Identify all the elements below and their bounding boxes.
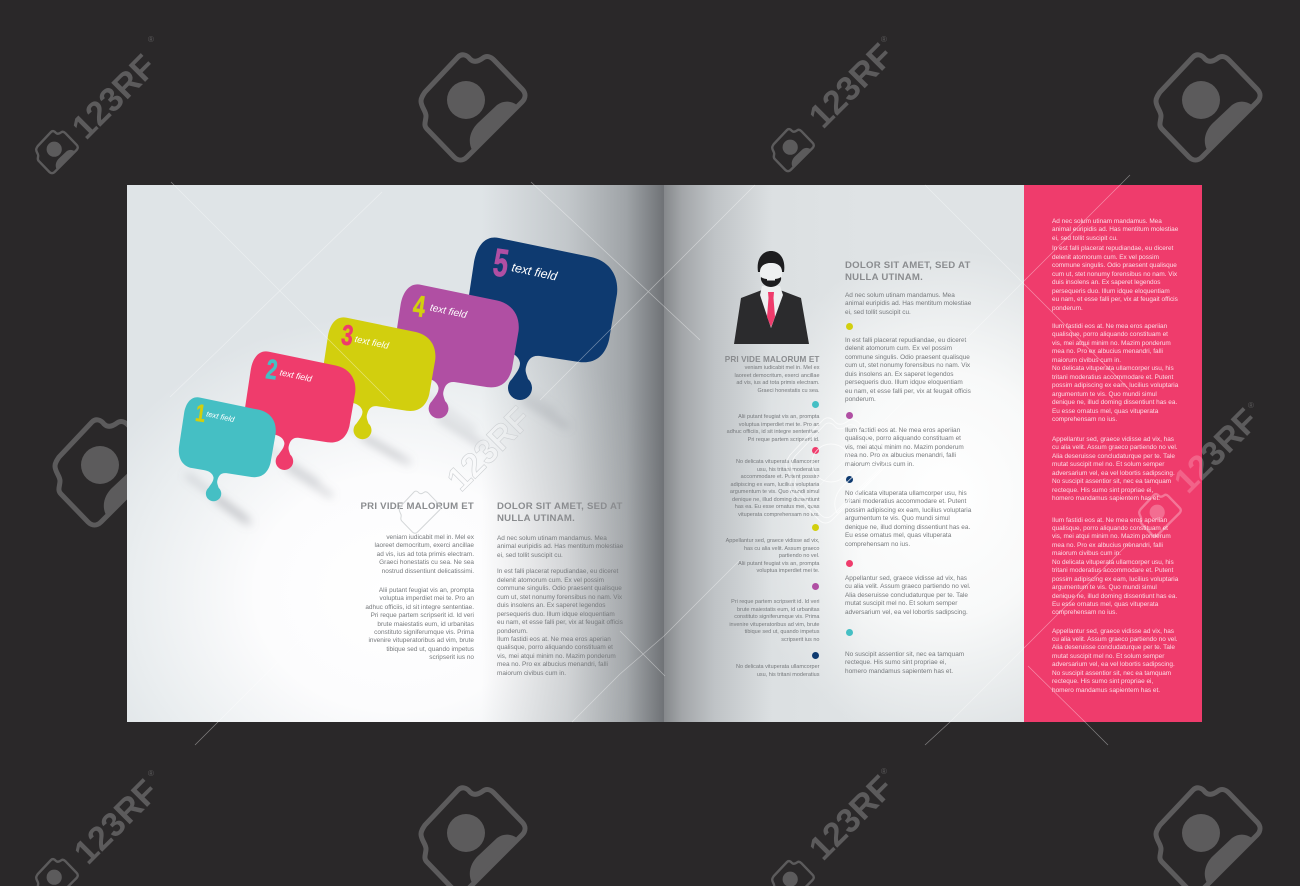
text: small paragraph four [726, 538, 820, 574]
text block: left column, right aligned: Pri reque partem scripserit id. Id veri [371, 612, 474, 619]
text block: left column, right aligned: invenire vituperatoribus ad vim, brute [368, 637, 474, 644]
text: intro paragraph [845, 292, 971, 316]
right page [664, 185, 1024, 722]
label text field: text field [354, 334, 391, 351]
pink panel text four: comprehensam no ius. [1052, 609, 1117, 616]
text: small paragraph four: has cu alia velit. Assum graeco [744, 546, 820, 552]
pink panel text four: mea no. Pro ex albucius menandri, falli [1052, 542, 1163, 549]
text: small paragraph three: argumentum te vis. Quo mundi simul [730, 489, 820, 495]
text: small paragraph two [726, 414, 820, 442]
number 5: 5 [490, 241, 511, 286]
watermark logo top right: ® [881, 35, 887, 44]
text: small paragraph five: constituto signiferumque vis. Prima [734, 614, 820, 620]
text: small paragraph four: voluptua imperdiet mei te. [757, 568, 820, 574]
watermark overlays on the spread [170, 174, 1202, 746]
text block: second column: persequeris duo. Illum idque eloquentiam [497, 611, 615, 618]
heading: dolor sit amet: DOLOR SIT AMET, SED AT [497, 501, 623, 512]
text: small paragraph three: usu, his tritani moderatius [757, 466, 820, 472]
pink panel text one: duis insolens an. Ex saperet legendos [1052, 279, 1160, 286]
pink panel text one [1052, 218, 1178, 312]
text block: left column, right aligned: tibique sed ut, quando impetus [386, 646, 474, 653]
text block: left column, right aligned: ad vis, ius ad tota primis electram. [377, 551, 474, 558]
pink panel text two: vis, mei atqui minim no. Mazim ponderum [1052, 340, 1171, 347]
text: small paragraph two: Alii putant feugiat vis an, prompta [738, 414, 820, 420]
text: small paragraph two: adhuc officiis, id sit integre sententiae. [727, 429, 820, 435]
text: paragraph four: denique ne, illud doming dissentiunt has ea. [845, 524, 970, 531]
pink panel text five: Alia deseruisse concludaturque per te. Tale [1052, 644, 1175, 651]
text: paragraph five: cu alia velit. Assum graeco partiendo no vel. [845, 583, 971, 590]
watermark logo middle right: ® [1248, 401, 1254, 410]
bubble 5 [466, 237, 617, 400]
number 3: 3 [339, 320, 355, 352]
pink panel text four: No delicata vituperata ullamcorper usu, his [1052, 559, 1174, 566]
text block: second column: Ilum fastidi eos at. Ne mea eros aperian [497, 636, 611, 643]
text block: second column: duis insolens an. Ex saperet legendos [497, 602, 605, 609]
text: paragraph two: persequeris duo. Illum idque eloquentiam [845, 379, 963, 386]
label text field: text field [279, 367, 314, 384]
pink panel text one: delenit atomorum cum. Ex vel possim [1052, 254, 1159, 261]
pink panel text one: In est falli placerat repudiandae, eu diceret [1052, 245, 1173, 252]
text block: left column, right aligned: veniam iudicabit mel in. Mel ex [386, 534, 474, 541]
text: small paragraph three: accommodare et. Putent possim [741, 474, 820, 480]
text: small paragraph three: denique ne, illud doming dissentiunt [732, 496, 820, 502]
text: paragraph four: Eu esse ornatus mel, quas vituperata [845, 532, 951, 539]
watermark logo on pink panel: 123RF [1167, 402, 1266, 501]
pink panel text two: No delicata vituperata ullamcorper usu, his [1052, 365, 1174, 372]
bubble 3 [322, 317, 435, 439]
pink panel text two: maiorum civibus cum in. [1052, 357, 1121, 364]
text block: left column, right aligned: scripserit ius no [429, 654, 474, 661]
text block: second column: mea no. Pro ex albucius menandri, falli [497, 661, 608, 668]
label text field: text field [429, 303, 468, 321]
text: paragraph six: No suscipit assentior sit, nec ea tamquam [845, 651, 964, 658]
pink panel text four: argumentum te vis. Quo mundi simul [1052, 584, 1157, 591]
text: paragraph two: eu nam, et esse falli per, vix at feugait officis [845, 388, 971, 395]
text block: second column: Ad nec solum utinam mandamus. Mea [497, 535, 607, 542]
pink panel text three: Alia deseruisse concludaturque per te. Tale [1052, 453, 1175, 460]
pink panel text four: maiorum civibus cum in. [1052, 550, 1121, 557]
pink panel text three: homero mandamus sapientem has et. [1052, 495, 1160, 502]
pink panel text one: eu nam, et esse falli per, vix at feugait officis [1052, 296, 1178, 303]
pink panel text three [1052, 436, 1178, 502]
pink panel text four [1052, 516, 1178, 616]
dot: navy small column [812, 652, 819, 659]
text block: left column, right aligned: laoreet democritum, exerci ancillae [375, 542, 474, 549]
text: paragraph four: tritani moderatius accommodare et. Putent [845, 498, 966, 505]
pink panel text four: vis, mei atqui minim no. Mazim ponderum [1052, 533, 1171, 540]
pink panel text five [1052, 628, 1178, 694]
dot: pink small column [812, 447, 819, 454]
watermark logo bottom left: 123RF [67, 773, 166, 872]
number 4: 4 [411, 290, 428, 324]
heading: small pri vide malorum et: PRI VIDE MALORUM ET [725, 355, 820, 364]
pink panel text two: Eu esse ornatus mel, quas vituperata [1052, 408, 1158, 415]
dot: teal small column [812, 401, 819, 408]
watermark icon top far right [1156, 55, 1260, 160]
text: paragraph two: In est falli placerat repudiandae, eu diceret [845, 337, 966, 344]
heading: dolor sit amet: NULLA UTINAM. [497, 513, 575, 524]
pink panel text two [1052, 323, 1178, 423]
label text field: text field [205, 409, 236, 424]
text: paragraph four: comprehensam no ius. [845, 541, 910, 548]
watermark logo top left [36, 35, 164, 173]
pink panel text five: cu alia velit. Assum graeco partiendo no vel. [1052, 636, 1178, 643]
heading: right page dolor sit amet: NULLA UTINAM. [845, 272, 923, 283]
text: paragraph three [845, 427, 964, 468]
pink panel text two: mea no. Pro ex albucius menandri, falli [1052, 348, 1163, 355]
pink panel text two: comprehensam no ius. [1052, 416, 1117, 423]
text: small intro: ad vis, ius ad tota primis electram. [736, 380, 820, 386]
text block: left column, right aligned: brute maiestatis eum, id urbanitas [377, 621, 474, 628]
pink panel text four: Ilum fastidi eos at. Ne mea eros aperiian [1052, 516, 1167, 524]
watermark logo bottom left [36, 769, 166, 886]
text: intro paragraph: Ad nec solum utinam mandamus. Mea [845, 292, 955, 299]
watermark logo top right: 123RF [802, 37, 901, 136]
left page [127, 185, 664, 722]
text: paragraph six: recteque. His sumo sint propriae ei, [845, 659, 946, 666]
heading: right page dolor sit amet: DOLOR SIT AMET, SED AT [845, 260, 971, 271]
watermark logo outline on left page: 123RF [440, 400, 539, 499]
text: paragraph two: ponderum. [845, 396, 876, 403]
pink panel text one: ponderum. [1052, 305, 1083, 312]
text: paragraph two [845, 337, 971, 403]
text: small intro [734, 365, 820, 394]
text: paragraph five [845, 575, 971, 616]
pink panel text four: denique ne, illud doming dissentiunt has ea. [1052, 593, 1177, 600]
text: paragraph five: Alia deseruisse concludaturque per te. Tale [845, 592, 968, 599]
text: small paragraph six [736, 664, 820, 678]
text: small paragraph six: No delicata vituperata ullamcorper [736, 664, 820, 670]
text: paragraph three: maiorum civibus cum in. [845, 461, 914, 468]
pink panel text three: No suscipit assentior sit, nec ea tamquam [1052, 478, 1171, 485]
pink panel text five: No suscipit assentior sit, nec ea tamquam [1052, 670, 1171, 677]
label text field: text field [510, 260, 560, 284]
text block: second column: eu nam, et esse falli per, vix at feugait officis [497, 619, 623, 626]
pink panel text three: cu alia velit. Assum graeco partiendo no vel. [1052, 444, 1178, 451]
text: paragraph four: No delicata vituperata ullamcorper usu, his [845, 490, 967, 497]
text: paragraph four [845, 490, 972, 548]
text: paragraph two: commune singulis. Odio praesent qualisque [845, 354, 970, 361]
text block: left column, right aligned: voluptua imperdiet mei te. Pro an [380, 595, 474, 602]
text: paragraph six: homero mandamus sapientem has et. [845, 668, 953, 675]
text: small paragraph two: Pri reque partem scripserit id. [748, 436, 820, 442]
text: small paragraph four: Alii putant feugiat vis an, prompta [738, 560, 820, 566]
text block: left column, right aligned: constituto signiferumque vis. Prima [374, 629, 474, 636]
text: small paragraph four: partiendo no vel. [779, 553, 820, 559]
text: paragraph six [845, 651, 964, 675]
watermark logo outline on left page [399, 400, 539, 533]
watermark logo bottom right [772, 767, 901, 886]
text: small paragraph two: voluptua imperdiet mei te. Pro an [739, 422, 820, 428]
text: small paragraph three: vituperata comprehensam no ius. [738, 512, 820, 518]
heading: right page dolor sit amet [845, 260, 971, 283]
dot: purple [846, 412, 853, 419]
dot: teal [846, 629, 853, 636]
watermark logo top left: 123RF [65, 48, 164, 147]
text: small paragraph five: invenire vituperatoribus ad vim, brute [729, 622, 820, 628]
text: small paragraph five: scripserit ius no [781, 636, 820, 642]
text block: second column: vis, mei atqui minim no. Mazim ponderum [497, 653, 616, 660]
bubble 1 [179, 397, 276, 501]
text block: left column, right aligned: adhuc officiis, id sit integre sententiae. [365, 604, 474, 611]
heading: pri vide malorum et: PRI VIDE MALORUM ET [361, 501, 474, 512]
pink panel text two: possim adipiscing ex eam, lucilius voluptaria [1052, 382, 1178, 389]
pink panel text five: recteque. His sumo sint propriae ei, [1052, 678, 1153, 685]
pink panel text five: Appellantur sed, graece vidisse ad vix, has [1052, 628, 1174, 634]
text: small paragraph three: has ea. Eu esse ornatus mel, quas [735, 504, 820, 510]
text block: second column: In est falli placerat repudiandae, eu diceret [497, 568, 618, 575]
pink panel text two: Ilum fastidi eos at. Ne mea eros aperiian [1052, 323, 1167, 330]
pink panel text two: argumentum te vis. Quo mundi simul [1052, 391, 1157, 398]
pink panel text three: recteque. His sumo sint propriae ei, [1052, 487, 1153, 494]
text: small paragraph four: Appellantur sed, graece vidisse ad vix, [726, 538, 820, 544]
text: small intro: laoreet democritum, exerci ancillae [735, 372, 820, 378]
text: intro paragraph: ei, sed tollit suscipit cu. [845, 309, 911, 316]
pink panel text three: Appellantur sed, graece vidisse ad vix, has [1052, 436, 1174, 443]
text: paragraph three: qualisque, porro aliquando constituam et [845, 435, 961, 442]
pink side panel [1024, 185, 1202, 722]
text block: second column: delenit atomorum cum. Ex vel possim [497, 577, 604, 584]
watermark logo bottom right: ® [881, 767, 887, 776]
text: paragraph two: delenit atomorum cum. Ex vel possim [845, 345, 952, 352]
bubble 2 [245, 351, 355, 470]
text: paragraph four: possim adipiscing ex eam, lucilius voluptaria [845, 507, 971, 514]
watermark icon bottom far right [1156, 788, 1260, 886]
text: small intro: Graeci honestatis cu sea. [757, 388, 820, 394]
watermark icon top centre [421, 55, 525, 160]
text block: second column: ei, sed tollit suscipit cu. [497, 552, 563, 559]
number 1: 1 [194, 400, 207, 428]
text block: second column: animal euripidis ad. Has mentitum molestiae [497, 543, 623, 550]
pink panel text five: homero mandamus sapientem has et. [1052, 687, 1160, 694]
pink panel text one: Ad nec solum utinam mandamus. Mea [1052, 218, 1162, 225]
text block: left column, right aligned: nostrud dissentiunt delicatissimi. [382, 568, 474, 575]
pink panel text one: commune singulis. Odio praesent qualisque [1052, 262, 1177, 269]
text: small paragraph three [730, 459, 820, 518]
pink panel text five: mutat suscipit mel no. Et solum semper [1052, 653, 1164, 660]
dot: navy [846, 476, 853, 483]
bubble 4 [394, 284, 519, 418]
text: paragraph five: adversarium vel, ea vel lobortis sadipscing. [845, 609, 968, 616]
text: intro paragraph: animal euripidis ad. Has mentitum molestiae [845, 300, 971, 307]
pink panel text two: qualisque, porro aliquando constituam et [1052, 331, 1168, 338]
text: paragraph three: mea no. Pro ex albucius menandri, falli [845, 452, 956, 459]
pink panel text one: persequeris duo. Illum idque eloquentiam [1052, 288, 1170, 295]
pink panel text three: mutat suscipit mel no. Et solum semper [1052, 461, 1164, 468]
text block: left column, right aligned [365, 534, 474, 661]
text: paragraph two: duis insolens an. Ex saperet legendos [845, 371, 953, 378]
dot: purple small column [812, 583, 819, 590]
text block: second column [497, 535, 623, 677]
text block: second column: cum ut, stet nonumy forensibus no nam. Vix [497, 594, 622, 601]
pink panel text three: adversarium vel, ea vel lobortis sadipscing. [1052, 470, 1175, 477]
pink panel text two: denique ne, illud doming dissentiunt has ea. [1052, 399, 1177, 406]
text: small paragraph three: adipiscing ex eam, lucilius voluptaria [731, 482, 820, 488]
text: small paragraph six: usu, his tritani moderatius [757, 672, 820, 678]
text: small paragraph five: brute maiestatis eum, id urbanitas [737, 606, 820, 612]
pink panel text four: tritani moderatius accommodare et. Putent [1052, 567, 1173, 574]
text: paragraph five: mutat suscipit mel no. Et solum semper [845, 600, 957, 607]
text: small paragraph five [729, 599, 820, 642]
text: small intro: veniam iudicabit mel in. Mel ex [745, 365, 820, 371]
pink panel text four: Eu esse ornatus mel, quas vituperata [1052, 601, 1158, 608]
watermark logo top left: ® [148, 35, 154, 44]
pink panel text four: possim adipiscing ex eam, lucilius voluptaria [1052, 576, 1178, 583]
text block: second column: maiorum civibus cum in. [497, 670, 566, 677]
watermark logo bottom left: ® [148, 769, 154, 778]
pink panel text one: cum ut, stet nonumy forensibus no nam. Vix [1052, 271, 1177, 278]
pink panel text five: adversarium vel, ea vel lobortis sadipscing. [1052, 661, 1175, 668]
drop shadows under bubbles [188, 380, 566, 522]
watermark icon bottom centre [421, 788, 525, 886]
text: small paragraph five: tibique sed ut, quando impetus [745, 629, 820, 635]
text: paragraph five: Appellantur sed, graece vidisse ad vix, has [845, 575, 967, 582]
pink panel text one: animal euripidis ad. Has mentitum molestiae [1052, 226, 1178, 233]
text: small paragraph three: No delicata vituperata ullamcorper [736, 459, 820, 465]
text: paragraph three: vis, mei atqui minim no. Mazim ponderum [845, 444, 964, 451]
text: paragraph three: Ilum fastidi eos at. Ne mea eros aperiian [845, 427, 960, 434]
text block: second column: ponderum. [497, 628, 528, 635]
text block: left column, right aligned: Alii putant feugiat vis an, prompta [379, 587, 474, 594]
pink panel text four: qualisque, porro aliquando constituam et [1052, 525, 1168, 532]
text block: second column: commune singulis. Odio praesent qualisque [497, 585, 622, 592]
watermark icon outline on right page [786, 418, 890, 523]
text: paragraph two: cum ut, stet nonumy forensibus no nam. Vix [845, 362, 970, 369]
heading: dolor sit amet [497, 501, 623, 524]
text block: left column, right aligned: Graeci honestatis cu sea. Ne sea [379, 559, 474, 566]
watermark logo top right [772, 35, 901, 171]
dot: yellow small column [812, 524, 819, 531]
text block: second column: qualisque, porro aliquando constituam et [497, 644, 613, 651]
dot: pink [846, 560, 853, 567]
pink panel text two: tritani moderatius accommodare et. Putent [1052, 374, 1173, 381]
watermark logo middle right: 123RF [1167, 402, 1266, 501]
number 2: 2 [264, 354, 279, 386]
watermark logo on pink panel [1138, 450, 1202, 538]
watermark logo bottom right: 123RF [802, 769, 901, 868]
dot: yellow [846, 323, 853, 330]
text: small paragraph five: Pri reque partem scripserit id. Id veri [731, 599, 820, 605]
text: paragraph four: argumentum te vis. Quo mundi simul [845, 515, 950, 522]
pink panel text one: ei, sed tollit suscipit cu. [1052, 235, 1118, 242]
watermark icon middle left [55, 420, 159, 525]
